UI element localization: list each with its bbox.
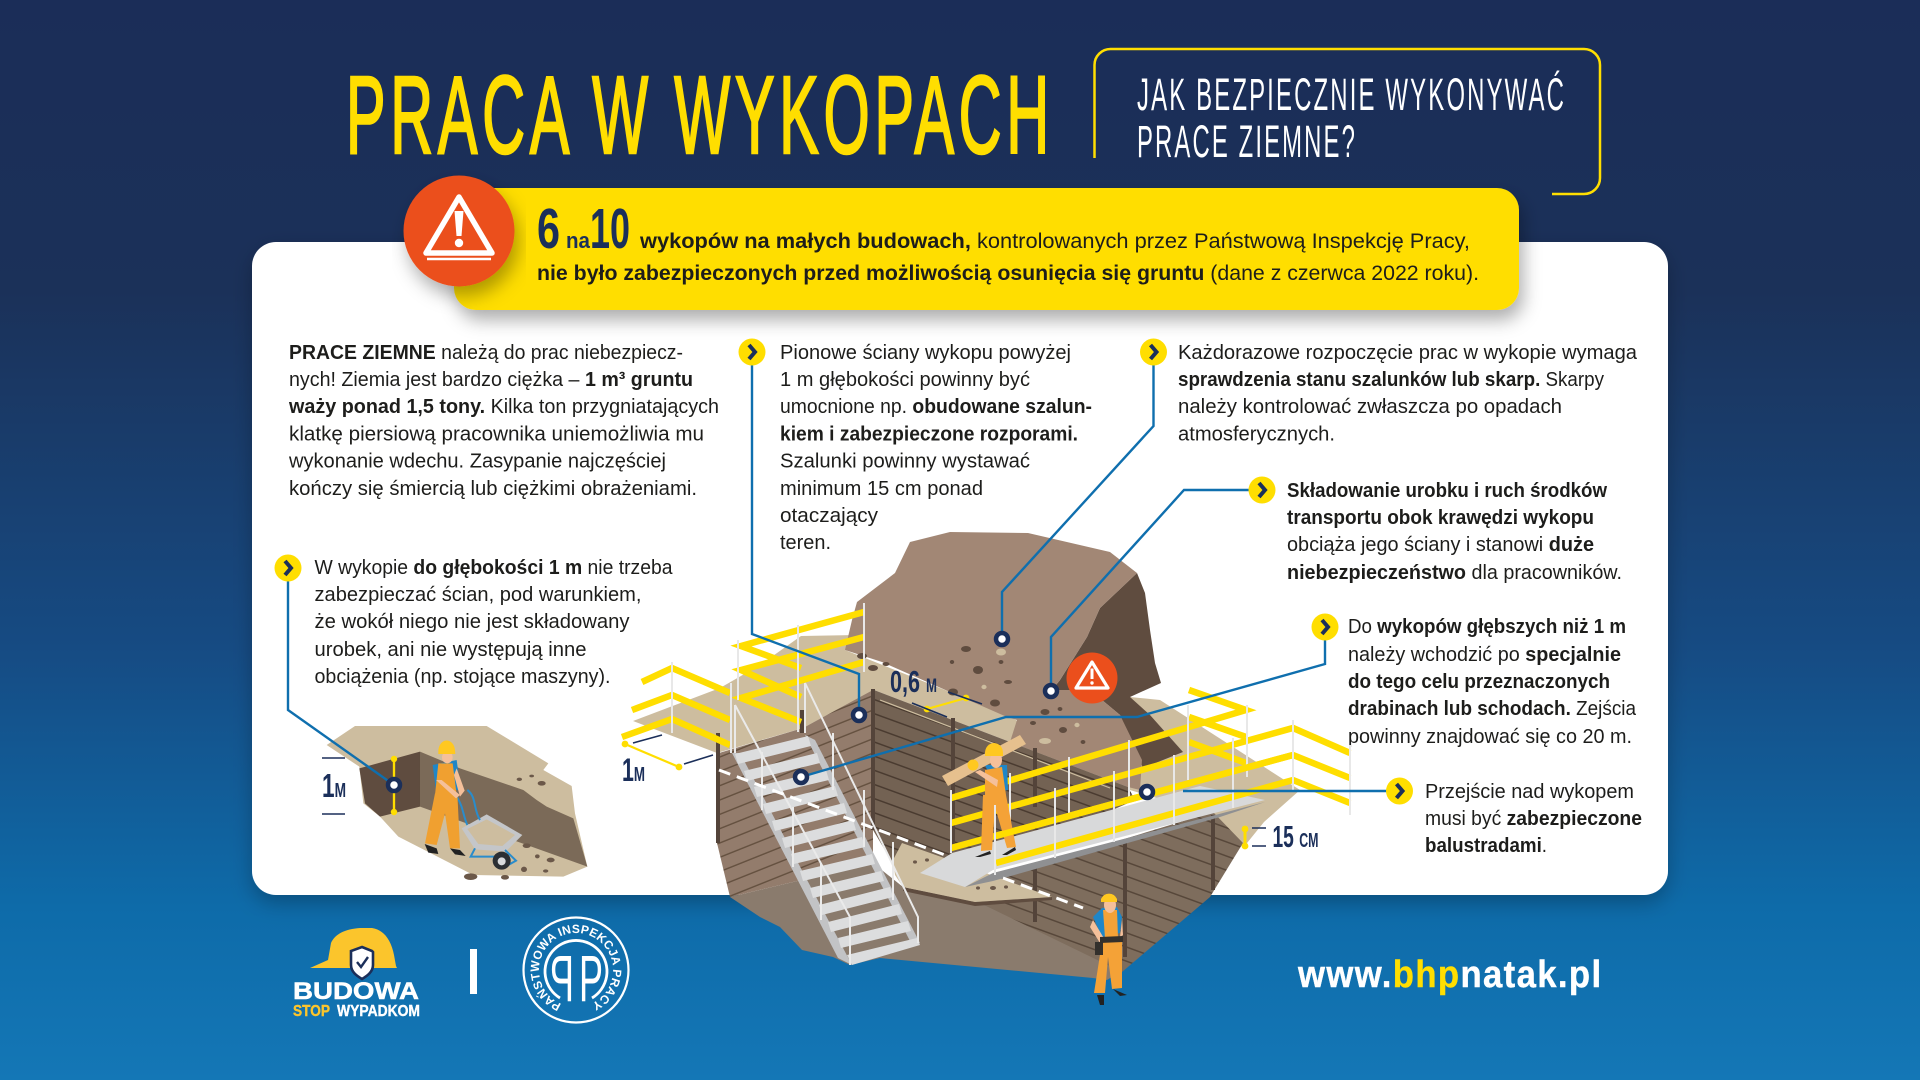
website: www.bhpnatak.pl [1297, 954, 1602, 996]
measure: small excavation depth [322, 756, 397, 815]
left wall [717, 690, 873, 897]
measure: 0.6 m: 0,6 M [890, 664, 937, 699]
text: vertical walls: minimum 15 cm ponad [780, 478, 983, 500]
divider bar [470, 949, 477, 994]
text: vertical walls: teren. [780, 532, 831, 554]
text: spoil storage [1287, 480, 1622, 584]
back wall [873, 690, 1135, 862]
text: intro: klatkę piersiową pracownika uniemożliwia mu [289, 424, 704, 446]
text: ladders and stairs: drabinach lub schodach. Zejścia [1348, 698, 1637, 720]
main title: PRACA W WYKOPACH [346, 54, 1054, 177]
banner: statistic: wykopów na małych budowach, kontrolowanych przez Państwową Inspekcję Pracy, [639, 230, 1470, 253]
text: ladders and stairs [1348, 616, 1637, 748]
logo: Budowa Stop Wypadkom: WYPADKOM [337, 1003, 420, 1020]
banner: statistic: 10 [590, 197, 630, 261]
banner: statistic: nie było zabezpieczonych przed możliwością osunięcia się gruntu (dane z czerwca 2022 roku). [537, 262, 1479, 285]
text: walkway: balustradami. [1425, 835, 1547, 857]
banner: statistic: 6 [537, 197, 560, 261]
text: intro: nych! Ziemia jest bardzo ciężka – 1 m³ gruntu [289, 369, 693, 391]
text: up to 1 m [314, 557, 673, 688]
text: up to 1 m: W wykopie do głębokości 1 m nie trzeba [314, 557, 673, 579]
measure: small excavation depth: 1M [322, 767, 346, 804]
panel: white card [252, 242, 1668, 895]
text: vertical walls: Pionowe ściany wykopu powyżej [780, 342, 1071, 364]
measure: 1 m from edge [622, 735, 713, 788]
text: spoil storage: transportu obok krawędzi wykopu [1287, 507, 1594, 529]
text: inspection: należy kontrolować zwłaszcza po opadach [1178, 396, 1562, 418]
walkway [965, 802, 1265, 887]
text: intro: kończy się śmiercią lub ciężkimi obrażeniami. [289, 478, 697, 500]
text: spoil storage: niebezpieczeństwo dla pracowników. [1287, 562, 1622, 584]
text: spoil storage: obciąża jego ściany i stanowi duże [1287, 534, 1594, 556]
floor [730, 863, 1123, 980]
banner: statistic [454, 188, 1519, 310]
worker carrying plank [942, 735, 1026, 857]
ground left [633, 635, 1130, 787]
rocks [857, 646, 1085, 744]
logo: Budowa Stop Wypadkom: STOP [293, 1003, 330, 1020]
icon: warning [404, 176, 514, 286]
text: inspection: sprawdzenia stanu szalunków lub skarp. Skarpy [1178, 369, 1604, 391]
ground right [1130, 697, 1300, 848]
logo: Budowa Stop Wypadkom [293, 928, 420, 1020]
text: up to 1 m: obciążenia (np. stojące maszyny). [314, 666, 610, 688]
icon: warning on soil heap [1066, 652, 1118, 704]
worker standing [1090, 894, 1127, 1005]
illustration: main excavation [622, 532, 1350, 1005]
walkway rails behind worker [951, 690, 1350, 848]
text: ladders and stairs: Do wykopów głębszych niż 1 m [1348, 616, 1626, 638]
text: intro [288, 342, 719, 500]
logo: PIP: P [579, 941, 603, 1015]
text: inspection [1178, 342, 1638, 446]
text: vertical walls [780, 342, 1092, 554]
dashed edge [719, 770, 1083, 908]
text: inspection: Każdorazowe rozpoczęcie prac w wykopie wymaga [1178, 342, 1638, 364]
text: intro: wykonanie wdechu. Zasypanie najczęściej [288, 450, 666, 472]
soil heap shadow [1052, 573, 1183, 768]
right wall [963, 812, 1243, 972]
measure: 15 cm: 15 CM [1272, 819, 1318, 854]
text: up to 1 m: że wokół niego nie jest składowany [314, 611, 630, 633]
measure: 0.6 m [890, 664, 982, 717]
text: walkway [1425, 781, 1642, 857]
illustration: small excavation with worker [327, 726, 587, 880]
measure: 15 cm [1242, 819, 1318, 854]
text: vertical walls: Szalunki powinny wystawać [780, 450, 1030, 472]
subtitle box [1094, 49, 1600, 194]
text: walkway: musi być zabezpieczone [1425, 808, 1642, 830]
text: intro: waży ponad 1,5 tony. Kilka ton przygniatających [288, 396, 719, 418]
bottom heap [903, 887, 1052, 906]
text: ladders and stairs: powinny znajdować się co 20 m. [1348, 726, 1632, 748]
text: vertical walls: 1 m głębokości powinny być [780, 369, 1030, 391]
text: walkway: Przejście nad wykopem [1425, 781, 1634, 803]
text: spoil storage: Składowanie urobku i ruch środków [1287, 480, 1607, 502]
walkway rails in front of worker [996, 755, 1350, 863]
text: up to 1 m: urobek, ani nie występują inne [314, 639, 586, 661]
measure: 1 m from edge: 1M [622, 752, 645, 788]
text: vertical walls: umocnione np. obudowane szalun- [780, 396, 1092, 418]
subtitle box: PRACE ZIEMNE? [1137, 116, 1357, 167]
leader lines [288, 352, 1399, 791]
target dots [388, 633, 1153, 798]
stairs [732, 683, 920, 965]
soil heap [845, 532, 1142, 790]
logo: PIP: PAŃSTWOWA INSPEKCJA PRACY [530, 924, 622, 1011]
banner: statistic: na [566, 228, 591, 253]
text: inspection: atmosferycznych. [1178, 424, 1335, 446]
text: up to 1 m: zabezpieczać ścian, pod warunkiem, [314, 584, 642, 606]
text: ladders and stairs: należy wchodzić po specjalnie [1348, 644, 1621, 666]
logo: PIP: P [550, 941, 574, 1015]
text: ladders and stairs: do tego celu przeznaczonych [1348, 671, 1610, 693]
text: vertical walls: otaczający [780, 505, 878, 527]
text: vertical walls: kiem i zabezpieczone rozporami. [780, 424, 1078, 446]
text: intro: PRACE ZIEMNE należą do prac niebezpiecz- [289, 342, 683, 364]
bullets [274, 338, 1413, 804]
top-left railings [622, 612, 864, 745]
subtitle box: JAK BEZPIECZNIE WYKONYWAĆ [1137, 69, 1566, 120]
logo: Budowa Stop Wypadkom: BUDOWA [293, 978, 419, 1005]
